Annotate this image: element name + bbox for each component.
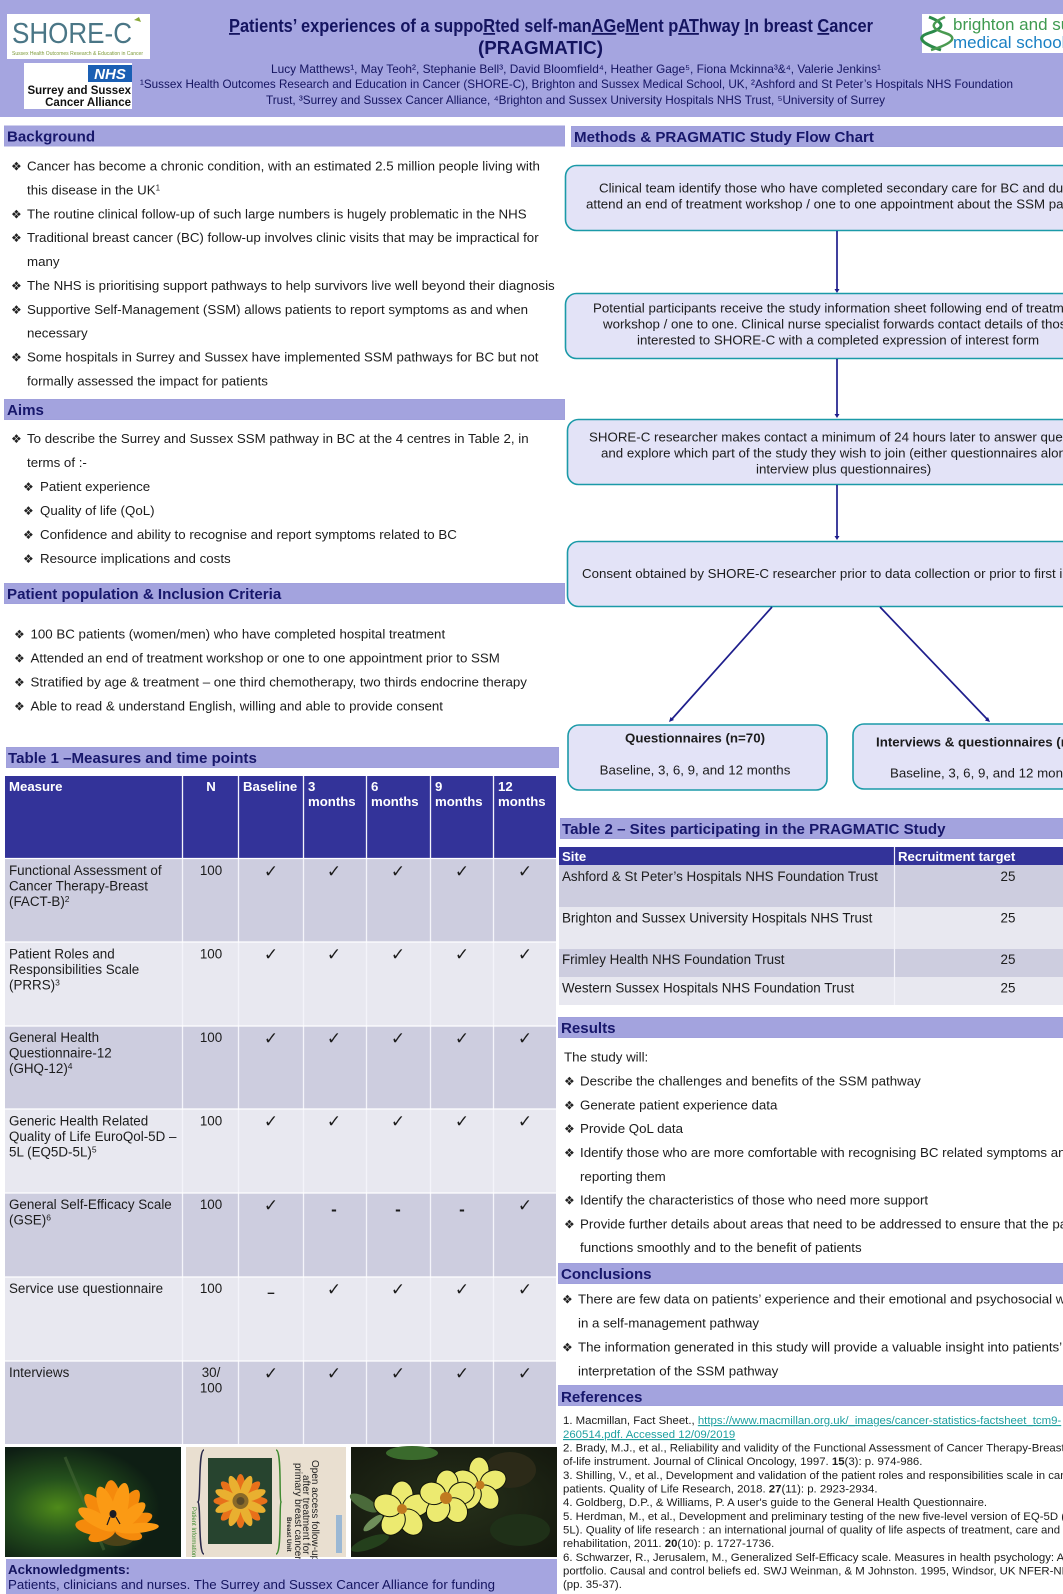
table 1 header row xyxy=(5,776,556,858)
heading: conclusions xyxy=(558,1264,1063,1284)
background bullets: ❖ xyxy=(11,303,22,317)
arrow: step 3 to 4 xyxy=(834,485,840,540)
row: PRRS: (PRRS) xyxy=(9,978,55,992)
table 1: measures and time points xyxy=(5,776,556,1444)
logo: NHS Surrey and Sussex Cancer Alliance xyxy=(24,63,132,109)
inclusion criteria bullets: Stratified by age & treatment – one third chemotherapy, two thirds endocrine therapy xyxy=(30,674,527,690)
heading: results xyxy=(558,1018,1063,1038)
arrow: to interviews xyxy=(880,607,990,722)
row: EQ5D-5L: ✓ xyxy=(518,1112,532,1132)
row: GHQ-12: General Health xyxy=(9,1030,99,1045)
inclusion criteria bullets: ❖ xyxy=(14,652,25,666)
row: interviews xyxy=(9,1364,532,1396)
inclusion criteria bullets: ❖ xyxy=(14,676,25,690)
row: Western Sussex: Western Sussex Hospitals NHS Foundation Trust xyxy=(562,980,855,996)
row: interviews: ✓ xyxy=(327,1364,341,1384)
photo: leaflet with gazania flower xyxy=(186,1447,346,1562)
logo: NHS Surrey and Sussex Cancer Alliance: Surrey and Sussex xyxy=(27,85,132,97)
inclusion criteria bullets: ❖ xyxy=(14,700,25,714)
heading: conclusions: Conclusions xyxy=(561,1266,652,1283)
aims bullets: Resource implications and costs xyxy=(40,551,231,566)
table 1 header row: 3 xyxy=(308,779,315,794)
conclusions text xyxy=(562,1292,1063,1378)
row: PRRS: 100 xyxy=(200,946,222,962)
row: FACT-B: (FACT-B) xyxy=(9,894,65,909)
row: interviews: ✓ xyxy=(518,1364,532,1384)
row: Ashford and St Peter's: Ashford & St Peter’s Hospitals NHS Foundation Trust xyxy=(562,869,878,884)
affiliations xyxy=(140,77,1013,107)
reference list: 260514.pdf. Accessed 12/09/2019 xyxy=(563,1429,735,1441)
heading: table 1 xyxy=(6,748,558,768)
heading: background xyxy=(4,126,564,146)
panel: results xyxy=(558,1018,1063,1255)
conclusions text: in a self-management pathway xyxy=(578,1316,759,1330)
table 1 header row: Measure xyxy=(9,779,63,794)
table 1 header row: months xyxy=(498,794,546,809)
results text: Provide QoL data xyxy=(580,1121,684,1136)
row: PRRS: ✓ xyxy=(391,945,405,965)
row: PRRS: ✓ xyxy=(455,945,469,965)
heading: aims xyxy=(4,400,564,420)
background bullets: formally assessed the impact for patients xyxy=(27,374,268,388)
photo: yellow primroses xyxy=(347,1446,557,1557)
row: interviews: 30/ xyxy=(202,1365,221,1380)
row: GHQ-12: ✓ xyxy=(455,1029,469,1049)
row: GHQ-12: Questionnaire-12 xyxy=(9,1046,112,1060)
row: EQ5D-5L xyxy=(9,1112,532,1160)
results text: ❖ xyxy=(564,1098,575,1112)
flow box: questionnaires xyxy=(568,725,827,790)
row: Western Sussex: 25 xyxy=(1001,980,1015,996)
row: EQ5D-5L: 5L (EQ5D-5L) xyxy=(9,1144,92,1160)
row: Brighton and Sussex: Brighton and Sussex University Hospitals NHS Trust xyxy=(562,910,873,926)
row: FACT-B xyxy=(9,862,532,909)
row: GHQ-12: ✓ xyxy=(518,1029,532,1049)
reference list xyxy=(563,1415,1063,1591)
flow step 4 xyxy=(568,542,1063,606)
background bullets: ❖ xyxy=(11,160,22,174)
row: Frimley: Frimley Health NHS Foundation Trust xyxy=(562,952,785,967)
panel: aims xyxy=(4,400,564,566)
row: service use: ✓ xyxy=(455,1280,469,1300)
row: EQ5D-5L: ✓ xyxy=(391,1112,405,1132)
results text: Describe the challenges and benefits of the SSM pathway xyxy=(580,1074,921,1088)
photo: leaflet with gazania flower: after treatment for xyxy=(300,1475,311,1555)
table 1 header row: 12 xyxy=(498,779,513,794)
table 1 header row: 6 xyxy=(371,779,378,794)
row: EQ5D-5L: ✓ xyxy=(327,1112,341,1132)
title: (PRAGMATIC) xyxy=(478,38,603,58)
aims bullets: Confidence and ability to recognise and report symptoms related to BC xyxy=(40,527,457,542)
flow step 2: workshop / one to one. Clinical nurse specialist forwards contact details of those xyxy=(602,316,1063,332)
photo: leaflet with gazania flower: Patient Information xyxy=(190,1507,196,1557)
row: PRRS: ✓ xyxy=(518,945,532,965)
inclusion criteria bullets: ❖ xyxy=(14,628,25,642)
photo: leaflet with gazania flower: Breast Unit xyxy=(285,1517,292,1553)
background bullets: ❖ xyxy=(11,279,22,293)
aims bullets xyxy=(11,431,529,566)
background bullets: The routine clinical follow-up of such large numbers is hugely problematic in the NHS xyxy=(27,206,527,222)
results text: ❖ xyxy=(564,1074,575,1088)
acknowledgments xyxy=(6,1559,557,1594)
results text: ❖ xyxy=(564,1122,575,1136)
acknowledgments: Patients, clinicians and nurses. The Surrey and Sussex Cancer Alliance for funding xyxy=(8,1577,495,1592)
logo: NHS Surrey and Sussex Cancer Alliance: NHS xyxy=(94,66,126,83)
heading: patient population xyxy=(4,584,564,604)
inclusion criteria bullets: Able to read & understand English, willing and able to provide consent xyxy=(30,698,443,714)
row: FACT-B: ✓ xyxy=(264,862,278,882)
logo: NHS Surrey and Sussex Cancer Alliance: Cancer Alliance xyxy=(45,97,131,109)
results text: Identify those who are more comfortable with recognising BC related symptoms and xyxy=(580,1145,1063,1160)
arrow: step 2 to 3 xyxy=(834,359,840,418)
row: GSE: - xyxy=(459,1200,465,1219)
authors: Lucy Matthews¹, May Teoh², Stephanie Bell³, David Bloomfield⁴, Heather Gage⁵, Fiona Mckinna³&⁴, Valerie Jenkins¹ xyxy=(271,62,881,76)
row: PRRS: ✓ xyxy=(327,945,341,965)
conclusions text: The information generated in this study will provide a valuable insight into patients’ xyxy=(578,1340,1062,1354)
row: GSE: - xyxy=(331,1200,337,1219)
row: GHQ-12: 4 xyxy=(68,1061,73,1071)
aims bullets: ❖ xyxy=(23,504,34,518)
panel: references xyxy=(558,1386,1063,1591)
row: FACT-B: ✓ xyxy=(327,862,341,882)
affiliations: ¹Sussex Health Outcomes Research and Education in Cancer (SHORE-C), Brighton and Sussex Medical School, UK, ²Ashford and St Peter’s Hospitals NHS Foundation xyxy=(140,77,1013,91)
row: Western Sussex xyxy=(562,980,1015,996)
row: FACT-B: 100 xyxy=(200,863,222,878)
logo: Brighton and Sussex Medical School: medical school xyxy=(953,33,1063,52)
background bullets: Cancer has become a chronic condition, with an estimated 2.5 million people living with xyxy=(27,158,540,174)
heading: patient population: Patient population & Inclusion Criteria xyxy=(7,586,282,603)
row: PRRS: Patient Roles and xyxy=(9,946,115,962)
table 1 header row: months xyxy=(371,794,419,809)
row: GSE: ✓ xyxy=(518,1196,532,1216)
row: FACT-B: ✓ xyxy=(391,862,405,882)
row: FACT-B: Functional Assessment of xyxy=(9,863,162,878)
row: interviews: 100 xyxy=(200,1380,222,1396)
row: service use: 100 xyxy=(200,1281,222,1296)
table 2: sites: Recruitment target xyxy=(898,849,1016,864)
title: Patients’ experiences of a suppoRted self-manAGeMent pAThway In breast Cancer xyxy=(229,16,873,36)
row: service use: – xyxy=(267,1285,275,1300)
inclusion criteria bullets: 100 BC patients (women/men) who have completed hospital treatment xyxy=(30,626,445,642)
heading: results: Results xyxy=(561,1020,616,1037)
heading: methods and flow chart xyxy=(572,126,1063,146)
row: Frimley: 25 xyxy=(1001,952,1015,967)
row: GHQ-12: ✓ xyxy=(264,1029,278,1049)
flow box: questionnaires: Baseline, 3, 6, 9, and 12 months xyxy=(600,762,791,778)
aims bullets: terms of :- xyxy=(27,455,87,470)
reference list: 5L). Quality of life research : an international journal of quality of life aspects of treatment, care and xyxy=(563,1524,1060,1536)
table 2: sites xyxy=(559,847,1063,1005)
flow chart xyxy=(566,166,1063,790)
results text: ❖ xyxy=(564,1146,575,1160)
row: Brighton and Sussex: 25 xyxy=(1001,910,1015,926)
results text xyxy=(564,1050,1063,1255)
photo: leaflet with gazania flower: Open access follow-up xyxy=(309,1460,320,1562)
background bullets: many xyxy=(27,254,60,269)
heading: table 2: Table 2 – Sites participating in the PRAGMATIC Study xyxy=(562,821,946,838)
aims bullets: ❖ xyxy=(23,552,34,566)
row: Ashford and St Peter's xyxy=(562,869,1015,884)
background bullets xyxy=(11,158,555,388)
table 1 header row: months xyxy=(308,794,356,809)
row: interviews: ✓ xyxy=(455,1364,469,1384)
row: FACT-B: ✓ xyxy=(518,862,532,882)
background bullets: Some hospitals in Surrey and Sussex have implemented SSM pathways for BC but not xyxy=(27,350,539,364)
reference list: 1. Macmillan, Fact Sheet., https://www.macmillan.org.uk/_images/cancer-statistics-factsheet_tcm9- xyxy=(563,1415,1061,1427)
row: PRRS: ✓ xyxy=(264,945,278,965)
table 1 header row: months xyxy=(435,794,483,809)
background bullets: this disease in the UK xyxy=(27,182,156,198)
table 1 header row: 9 xyxy=(435,779,442,794)
aims bullets: Quality of life (QoL) xyxy=(40,503,155,518)
flow step 2 xyxy=(566,294,1063,358)
reference list: (pp. 35-37). xyxy=(563,1579,622,1591)
aims bullets: ❖ xyxy=(11,432,22,446)
row: service use: Service use questionnaire xyxy=(9,1281,163,1296)
affiliations: Trust, ³Surrey and Sussex Cancer Alliance, ⁴Brighton and Sussex University Hospitals NHS Trust, ⁵University of Surrey xyxy=(266,93,885,107)
row: GSE: ✓ xyxy=(264,1196,278,1216)
results text: Identify the characteristics of those who need more support xyxy=(580,1192,928,1208)
row: FACT-B: 2 xyxy=(65,894,70,904)
photo: orange flower xyxy=(5,1447,181,1557)
aims bullets: ❖ xyxy=(23,528,34,542)
row: GSE: 6 xyxy=(46,1212,51,1222)
logo: SHORE-C: SHORE-C xyxy=(12,18,132,50)
panel: conclusions xyxy=(558,1264,1063,1378)
background bullets: ❖ xyxy=(11,208,22,222)
table 2: sites: Site xyxy=(562,849,586,864)
acknowledgments: Acknowledgments: xyxy=(8,1562,130,1577)
row: Frimley xyxy=(562,952,1015,967)
header band xyxy=(0,0,1063,117)
row: FACT-B: ✓ xyxy=(455,862,469,882)
row: interviews: ✓ xyxy=(264,1364,278,1384)
row: service use xyxy=(9,1280,532,1300)
heading: aims: Aims xyxy=(7,402,44,419)
table 1 header row: Baseline xyxy=(243,779,297,794)
row: PRRS xyxy=(9,945,532,992)
row: service use: ✓ xyxy=(518,1280,532,1300)
row: FACT-B: Cancer Therapy-Breast xyxy=(9,878,148,894)
background bullets: ❖ xyxy=(11,350,22,364)
heading: methods and flow chart: Methods & PRAGMATIC Study Flow Chart xyxy=(574,129,874,146)
row: GHQ-12: (GHQ-12) xyxy=(9,1061,68,1076)
reference list: 4. Goldberg, D.P., & Williams, P. A user's guide to the General Health Questionnaire. xyxy=(563,1497,987,1509)
heading: table 2 xyxy=(560,818,1063,838)
background bullets: The NHS is prioritising support pathways to help survivors live well beyond their diagnosis xyxy=(27,278,555,293)
row: GSE: (GSE) xyxy=(9,1212,46,1228)
logo: Brighton and Sussex Medical School xyxy=(922,14,1063,53)
background bullets: Supportive Self-Management (SSM) allows patients to report symptoms as and when xyxy=(27,302,528,317)
table 1 header row: N xyxy=(206,779,216,794)
reference list: of-life instrument. Journal of Clinical Oncology, 1997. 15(3): p. 974-986. xyxy=(563,1456,922,1468)
row: Ashford and St Peter's: 25 xyxy=(1001,869,1015,884)
row: GHQ-12: ✓ xyxy=(391,1029,405,1049)
conclusions text: ❖ xyxy=(562,1292,573,1306)
inclusion criteria bullets: Attended an end of treatment workshop or one to one appointment prior to SSM xyxy=(30,650,500,666)
results text: Generate patient experience data xyxy=(580,1098,778,1112)
row: GSE: General Self-Efficacy Scale xyxy=(9,1197,172,1212)
results text: ❖ xyxy=(564,1194,575,1208)
row: PRRS: Responsibilities Scale xyxy=(9,962,139,977)
results text: ❖ xyxy=(564,1218,575,1232)
logo: SHORE-C: Sussex Health Outcomes Research & Education in Cancer xyxy=(12,51,143,57)
logo: SHORE-C xyxy=(7,14,150,59)
results text: The study will: xyxy=(564,1050,648,1064)
flow step 1 xyxy=(566,166,1063,230)
photo: leaflet with gazania flower: primary breast cancer xyxy=(292,1463,303,1560)
flow step 3 xyxy=(568,420,1063,484)
flow step 2: interested to SHORE-C with a completed expression of interest form xyxy=(637,332,1039,348)
background bullets: ❖ xyxy=(11,231,22,245)
row: GSE: 100 xyxy=(200,1197,222,1212)
row: GHQ-12 xyxy=(9,1029,532,1076)
row: service use: ✓ xyxy=(327,1280,341,1300)
row: EQ5D-5L: ✓ xyxy=(455,1112,469,1132)
row: EQ5D-5L: Generic Health Related xyxy=(9,1114,148,1128)
row: GSE: - xyxy=(395,1200,401,1219)
row: EQ5D-5L: 100 xyxy=(200,1114,222,1128)
heading: table 1: Table 1 –Measures and time points xyxy=(8,750,257,767)
background bullets: necessary xyxy=(27,326,88,340)
background bullets: 1 xyxy=(156,184,161,192)
reference list: patients. Quality of Life Research, 2018. 27(11): p. 2923-2934. xyxy=(563,1484,878,1496)
row: GSE xyxy=(9,1196,532,1228)
panel: background xyxy=(4,126,564,388)
row: EQ5D-5L: 5 xyxy=(92,1144,97,1154)
row: EQ5D-5L: Quality of Life EuroQol-5D – xyxy=(9,1129,177,1144)
aims bullets: ❖ xyxy=(23,480,34,494)
inclusion criteria bullets xyxy=(14,626,527,714)
aims bullets: Patient experience xyxy=(40,479,150,494)
row: Brighton and Sussex xyxy=(562,910,1015,926)
row: EQ5D-5L: ✓ xyxy=(264,1112,278,1132)
flow step 3: interview plus questionnaires) xyxy=(756,462,931,476)
row: GHQ-12: ✓ xyxy=(327,1029,341,1049)
conclusions text: ❖ xyxy=(562,1340,573,1354)
results text: reporting them xyxy=(580,1169,666,1184)
row: service use: ✓ xyxy=(391,1280,405,1300)
arrow: step 1 to 2 xyxy=(834,231,840,293)
row: PRRS: 3 xyxy=(55,978,60,988)
aims bullets: To describe the Surrey and Sussex SSM pathway in BC at the 4 centres in Table 2, in xyxy=(27,431,529,446)
reference list: rehabilitation, 2011. 20(10): p. 1727-1736. xyxy=(563,1538,774,1550)
title xyxy=(229,16,873,58)
row: interviews: Interviews xyxy=(9,1365,70,1380)
row: interviews: ✓ xyxy=(391,1364,405,1384)
arrow: to questionnaires xyxy=(669,607,772,722)
heading: references xyxy=(558,1386,1063,1406)
heading: references: References xyxy=(561,1389,642,1406)
flow box: questionnaires: Questionnaires (n=70) xyxy=(625,730,765,746)
flow box: interviews and questionnaires xyxy=(853,724,1063,789)
conclusions text: interpretation of the SSM pathway xyxy=(578,1364,779,1378)
results text: functions smoothly and to the benefit of patients xyxy=(580,1240,862,1255)
background bullets: Traditional breast cancer (BC) follow-up involves clinic visits that may be impractical for xyxy=(27,230,539,245)
row: GHQ-12: 100 xyxy=(200,1030,222,1045)
heading: background: Background xyxy=(7,128,95,146)
panel: patient population xyxy=(4,584,564,714)
